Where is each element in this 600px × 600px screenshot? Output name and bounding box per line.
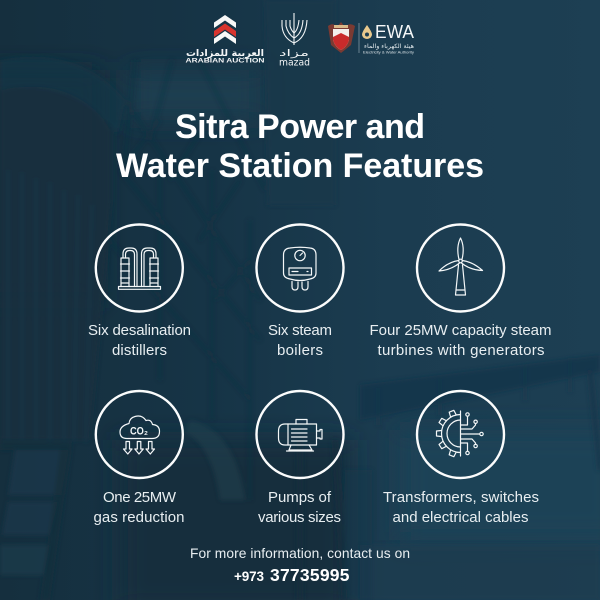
feature: six desalination distillers xyxy=(88,224,191,359)
phone number xyxy=(234,565,350,585)
left cylinder xyxy=(0,87,112,440)
icon ring: distillers xyxy=(96,224,183,312)
label: steam turbines xyxy=(370,322,552,359)
logo: EWA: EWA xyxy=(375,22,414,42)
title: Sitra Power and xyxy=(175,108,425,146)
feature: steam turbines with generators xyxy=(370,224,552,359)
label: steam turbines: Four 25MW capacity steam xyxy=(370,322,552,339)
label: gas reduction: gas reduction xyxy=(94,509,184,526)
icon: electric motor xyxy=(278,420,322,451)
right structure xyxy=(360,355,600,420)
logo: Mazad: مزاد xyxy=(279,49,309,59)
label: transformers, switches and cables: and electrical cables xyxy=(392,509,528,526)
label: pumps of various sizes: various sizes xyxy=(258,509,341,526)
label: pumps of various sizes: Pumps of xyxy=(268,489,332,506)
logo: Mazad xyxy=(279,13,310,68)
label: steam turbines: turbines with generators xyxy=(378,342,544,359)
logo: Arabian Auction: العربية للمزادات xyxy=(186,48,264,59)
feature: transformers, switches and cables xyxy=(383,391,539,526)
label: gas reduction xyxy=(94,489,184,526)
contact line: For more information, contact us on xyxy=(190,546,410,561)
label: six desalination distillers: distillers xyxy=(112,342,167,359)
icon text: CO2: CO₂ xyxy=(130,426,148,438)
logo: Arabian Auction xyxy=(186,15,265,64)
lower left panels xyxy=(8,450,70,495)
label: six steam boilers xyxy=(268,322,332,359)
logo: EWA: هيئة الكهرباء والماء xyxy=(364,43,414,50)
lattice xyxy=(105,60,265,500)
label: transformers, switches and cables xyxy=(383,489,539,526)
label: six desalination distillers: Six desalination xyxy=(88,322,191,339)
label: six steam boilers: Six steam xyxy=(268,322,332,339)
logo: EWA: Electricity & Water Authority xyxy=(363,50,414,54)
chimney xyxy=(265,0,335,205)
feature: gas reduction xyxy=(94,391,184,526)
icon ring: transformers xyxy=(417,391,504,478)
label: six steam boilers: boilers xyxy=(277,342,323,359)
icon ring: CO2 xyxy=(96,391,183,478)
logo: Mazad: mazad xyxy=(279,58,310,68)
icon: gear with circuit xyxy=(436,410,483,457)
label: transformers, switches and cables: Transformers, switches xyxy=(383,489,539,506)
feature: pumps of various sizes xyxy=(256,391,344,526)
icon: CO2 cloud with arrows xyxy=(120,416,160,454)
title xyxy=(116,108,484,185)
icon: wind turbine xyxy=(439,238,482,295)
label: pumps of various sizes xyxy=(258,489,341,526)
icon ring: boilers xyxy=(256,224,344,312)
icon ring: turbines xyxy=(417,224,504,312)
label: six desalination distillers xyxy=(88,322,191,359)
title: Water Station Features xyxy=(116,147,484,185)
icon: boiler xyxy=(284,247,316,290)
phone number: +973 xyxy=(234,569,264,584)
logo: EWA xyxy=(359,22,414,54)
label: gas reduction: One 25MW xyxy=(103,489,177,506)
logo: Bahrain crest xyxy=(328,22,355,53)
icon ring: pumps xyxy=(256,391,344,478)
phone number: 37735995 xyxy=(270,565,350,585)
feature: six steam boilers xyxy=(256,224,344,359)
icon: distillers xyxy=(118,248,160,289)
logo: Arabian Auction: ARABIAN AUCTION xyxy=(186,58,265,64)
corrugations xyxy=(8,170,92,442)
